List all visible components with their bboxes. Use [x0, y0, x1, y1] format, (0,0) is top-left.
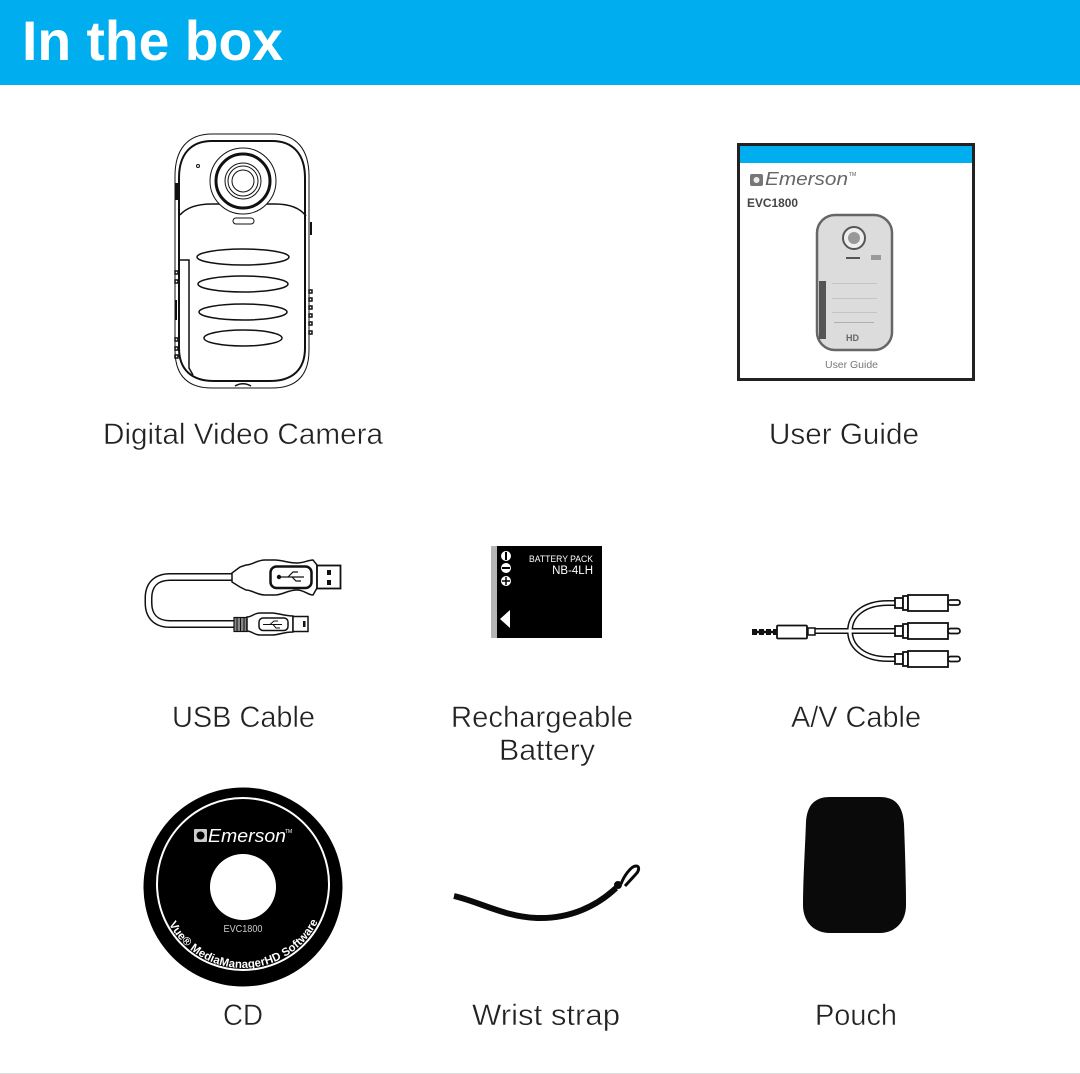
icon: user guide cover: HD — [846, 333, 859, 343]
icon: CD: Emerson — [208, 826, 286, 846]
label: digital video camera: Digital Video Camera — [103, 418, 383, 451]
label: USB cable: USB Cable — [172, 701, 315, 734]
label: pouch: Pouch — [815, 999, 897, 1032]
title: In the box — [22, 9, 283, 72]
icon: user guide cover: TM — [849, 172, 856, 178]
label: CD: CD — [223, 999, 263, 1032]
icon: rechargeable battery: NB-4LH — [552, 565, 593, 577]
label: rechargeable battery: Battery — [499, 734, 595, 767]
icon: USB cable — [148, 560, 340, 635]
icon: pouch — [803, 797, 906, 933]
icon: user guide cover — [738, 144, 974, 380]
icon: CD: EVC1800 — [224, 924, 263, 935]
header band with title — [0, 0, 1080, 85]
icon: wrist strap — [454, 866, 639, 918]
icon: rechargeable battery: BATTERY PACK — [529, 554, 594, 565]
icon: CD: Vue® MediaManagerHD Software — [170, 920, 317, 969]
icon: CD — [144, 788, 342, 986]
icon: digital video camera — [175, 134, 312, 388]
icon: rechargeable battery — [491, 546, 602, 638]
label: wrist strap: Wrist strap — [472, 999, 620, 1032]
label: rechargeable battery — [451, 701, 633, 767]
icon: user guide cover: EVC1800 — [747, 198, 798, 210]
label: A/V cable: A/V Cable — [791, 701, 921, 734]
icon: user guide cover: Emerson — [765, 169, 848, 189]
label: user guide: User Guide — [769, 418, 919, 451]
icon: A/V cable — [752, 595, 960, 667]
icon: user guide cover: User Guide — [825, 360, 878, 371]
icon: CD: TM — [285, 829, 292, 835]
label: rechargeable battery: Rechargeable — [451, 701, 633, 734]
